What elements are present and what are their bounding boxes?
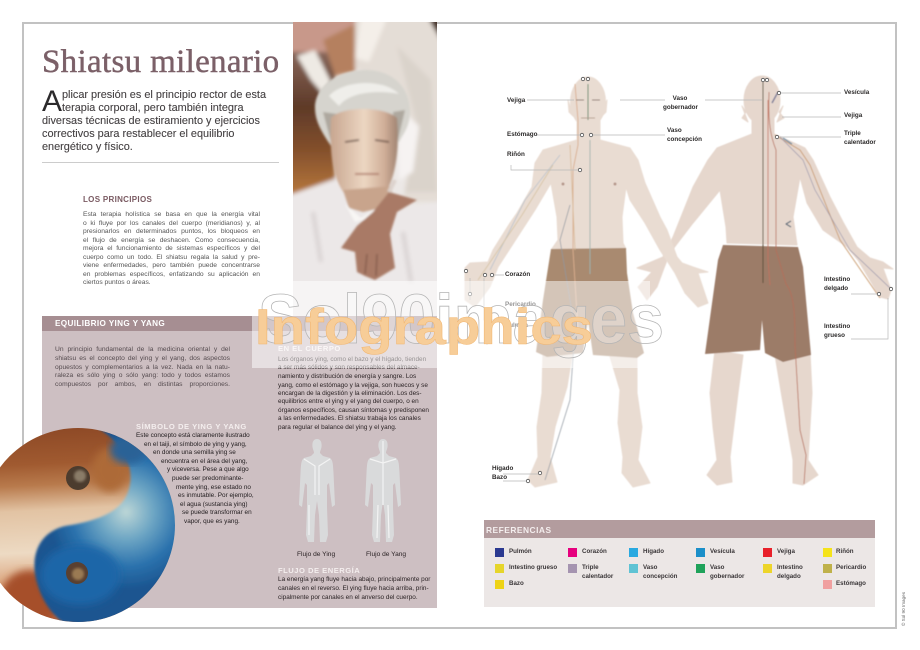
intro text: diversas técnicas de estiramiento y ejercicios <box>42 115 260 127</box>
text: equilibrio: raleza es sólo ying o sólo yang: todo y todos estamos <box>55 372 230 379</box>
heading: flujo de energia: FLUJO DE ENERGÍA <box>278 566 360 575</box>
label: vaso gobernador <box>663 95 698 110</box>
text: flujo de energia: canales en el reverso. El ying fluye hacia arriba, prin- <box>278 585 429 592</box>
label: vesicula: Vesícula <box>844 89 869 96</box>
text: equilibrio: compuestos por ambos, en distintas proporciones. <box>55 381 230 388</box>
legend: intestino grueso <box>495 564 557 573</box>
legend: pulmon <box>495 548 532 557</box>
watermark text: Sol90images <box>258 280 664 358</box>
label: pulmon: Pulmón <box>505 322 528 329</box>
label: higado bazo: Bazo <box>492 474 507 480</box>
text: simbolo <box>136 432 254 525</box>
text: simbolo: el agua (sustancia ying) <box>180 501 248 508</box>
heading band: equilibrio ying y yang <box>42 316 437 330</box>
legend: pericardio <box>823 564 866 573</box>
figure: back view <box>637 76 893 485</box>
text: simbolo: en donde una semilla ying se <box>153 449 236 456</box>
caption: flujo de yang: Flujo de Yang <box>366 551 406 558</box>
labels and leader lines <box>464 76 894 484</box>
legend: bazo: Bazo <box>509 580 524 587</box>
text: los principios: Esta terapia holística se basa en que la energía vital <box>83 211 260 218</box>
text: simbolo: se puede transformar en <box>182 509 252 516</box>
text: en el cuerpo: equilibrios entre el ying y el yang del cuerpo, o en <box>278 398 419 405</box>
label: vaso concepcion: Vaso <box>667 127 682 134</box>
legend: vaso gobernador <box>696 564 744 580</box>
label: pericardio: Pericardio <box>505 301 536 308</box>
text: los principios: presionarlos en determinados puntos, los bloqueos en <box>83 228 260 235</box>
label: intestino delgado: delgado <box>824 284 848 292</box>
legend: bazo <box>495 580 524 589</box>
text: en el cuerpo: Los órganos ying, como el bazo y el hígado, tienden <box>278 356 426 363</box>
legend: estomago: Estómago <box>836 580 866 587</box>
label: estomago: Estómago <box>507 131 537 138</box>
legend: vaso gobernador: Vaso <box>710 564 724 571</box>
icon: yin and yang flow figures <box>299 439 401 542</box>
text: los principios: mejora el funcionamiento de sistemas específicos y del <box>83 245 260 252</box>
bodies with meridians <box>464 75 894 488</box>
label: vaso concepcion <box>667 127 702 142</box>
heading: los principios: LOS PRINCIPIOS <box>83 195 152 204</box>
legend: vejiga: Vejiga <box>777 548 795 555</box>
text: simbolo: puede ser predominante- <box>172 475 243 482</box>
legend: pulmon: Pulmón <box>509 548 532 555</box>
legend: intestino delgado: delgado <box>777 572 801 580</box>
heading: en el cuerpo: EN EL CUERPO <box>278 344 341 353</box>
label: triple calentador: calentador <box>844 138 876 146</box>
legend: vejiga <box>763 548 795 557</box>
label: intestino grueso: Intestino <box>824 323 850 330</box>
text: en el cuerpo: yang, como el estómago y la vejiga, son huecos y se <box>278 382 428 388</box>
credit: © Sol 90 Images <box>901 592 906 626</box>
panel: yin yang background <box>42 316 437 608</box>
text: equilibrio: shiatsu es el concepto del ying y el yang, dos aspectos <box>55 355 230 362</box>
text: los principios: o ki fluye por los canales del cuerpo (meridianos) y, al <box>83 220 260 227</box>
text: simbolo: mente ying, ese estado no <box>176 484 251 491</box>
legend: vesicula <box>696 548 735 557</box>
text: simbolo: y viceversa. Pese a que algo <box>167 466 249 473</box>
legend: vesicula: Vesícula <box>710 548 735 555</box>
caption: flujo de ying: Flujo de Ying <box>297 551 335 558</box>
legend: corazon <box>568 548 607 557</box>
label: intestino grueso: grueso <box>824 332 845 338</box>
text: en el cuerpo: a ser más sólidos y son responsables del almace- <box>278 364 420 371</box>
legend: triple calentador: Triple <box>582 564 599 571</box>
heading band: equilibrio ying y yang: EQUILIBRIO YING Y YANG <box>55 319 165 328</box>
intro text: energético y físico. <box>42 141 133 153</box>
legend: triple calentador: calentador <box>582 572 613 580</box>
watermark band <box>252 281 650 368</box>
text: equilibrio: opuestos y complementarios a la vez. Nada en la natu- <box>55 364 230 371</box>
legend: vaso concepcion: concepción <box>643 572 677 580</box>
text: en el cuerpo: encargan de la digestión y la eliminación. Los des- <box>278 390 422 397</box>
text: equilibrio: Un principio fundamental de la medicina oriental y del <box>55 346 230 353</box>
label: intestino delgado: Intestino <box>824 276 850 283</box>
text: en el cuerpo: namiento y distribución de energía y sangre. Los <box>278 373 416 380</box>
legend: intestino delgado <box>763 564 803 580</box>
yin yang symbol <box>0 428 175 622</box>
text: simbolo: encuentra en el área del yang, <box>161 458 247 465</box>
label: higado bazo <box>492 465 514 480</box>
label: triple calentador <box>844 130 876 146</box>
label: vaso gobernador: Vaso <box>673 95 687 102</box>
text: en el cuerpo <box>278 344 429 431</box>
title: Shiatsu milenario <box>42 44 280 80</box>
legend: corazon: Corazón <box>582 548 607 555</box>
label: vejiga back: Vejiga <box>844 112 862 119</box>
text: los principios: el flujo de energía se deshacen. Como consecuencia, <box>83 237 260 244</box>
intro text: plicar presión es el principio rector de esta <box>62 89 266 101</box>
watermark text: Infographics <box>255 299 593 355</box>
text: flujo de energia: La energía yang fluye hacia abajo, principalmente por <box>278 576 430 583</box>
label: intestino delgado <box>824 276 850 292</box>
legend: pericardio: Pericardio <box>836 564 866 571</box>
legend: rinon: Riñón <box>836 548 854 555</box>
label: vaso gobernador: gobernador <box>663 104 698 110</box>
text: en el cuerpo: para regular el balance del ying y el yang. <box>278 424 397 431</box>
legend: rinon <box>823 548 854 557</box>
label: rinon: Riñón <box>507 151 525 158</box>
intro text <box>42 85 266 153</box>
legend: intestino grueso: Intestino grueso <box>509 564 557 571</box>
panel: referencias legend <box>484 520 875 607</box>
text: en el cuerpo: órganos específicos, causan síntomas y predisponen <box>278 407 429 414</box>
legend: higado: Hígado <box>643 548 664 555</box>
label: higado bazo: Hígado <box>492 465 513 472</box>
text: los principios: en problemas específicos, enfatizando su aplicación en <box>83 271 260 278</box>
label: intestino grueso <box>824 323 850 338</box>
legend: vaso gobernador: gobernador <box>710 572 744 580</box>
legend: triple calentador <box>568 564 614 580</box>
label: corazon: Corazón <box>505 271 530 278</box>
text: flujo de energia: cipalmente por canales en el anverso del cuerpo. <box>278 594 418 601</box>
text: flujo de energia <box>278 576 430 601</box>
legend heading: REFERENCIAS <box>486 525 552 535</box>
text: los principios: viene enfermedades, pero también puede concentrarse <box>83 262 260 269</box>
figure: front view <box>465 77 708 487</box>
photo: shiatsu massage <box>293 22 437 316</box>
drop cap: A <box>42 85 62 118</box>
text: equilibrio <box>55 346 230 388</box>
text: en el cuerpo: a las enfermedades. El shiatsu trabaja los canales <box>278 415 421 422</box>
intro text: terapia corporal, pero también integra <box>62 102 244 114</box>
text: los principios <box>83 211 260 286</box>
heading: simbolo de ying y yang: SÍMBOLO DE YING Y YANG <box>136 422 247 431</box>
intro text: correctivos para restablecer el equilibrio <box>42 128 234 140</box>
text: los principios: ciertos puntos o áreas. <box>83 279 151 286</box>
text: simbolo: Este concepto está claramente ilustrado <box>136 432 250 439</box>
figure: flujo de yang <box>365 439 401 542</box>
label: vaso concepcion: concepción <box>667 136 702 142</box>
text: los principios: cuerpo como un todo. El shiatsu regala la salud y pre- <box>83 254 260 261</box>
text: simbolo: vapor, que es yang. <box>184 518 240 525</box>
legend: vaso concepcion <box>629 564 678 580</box>
legend: vaso concepcion: Vaso <box>643 564 657 571</box>
legend: intestino delgado: Intestino <box>777 564 803 571</box>
text: simbolo: en el taiji, el símbolo de ying y yang, <box>144 441 247 448</box>
legend: estomago <box>823 580 866 589</box>
legend: higado <box>629 548 664 557</box>
label: triple calentador: Triple <box>844 130 861 137</box>
figure: flujo de ying <box>299 439 335 542</box>
text: simbolo: es inmutable. Por ejemplo, <box>178 492 254 499</box>
label: vejiga front: Vejiga <box>507 97 525 104</box>
legend heading <box>484 520 875 538</box>
